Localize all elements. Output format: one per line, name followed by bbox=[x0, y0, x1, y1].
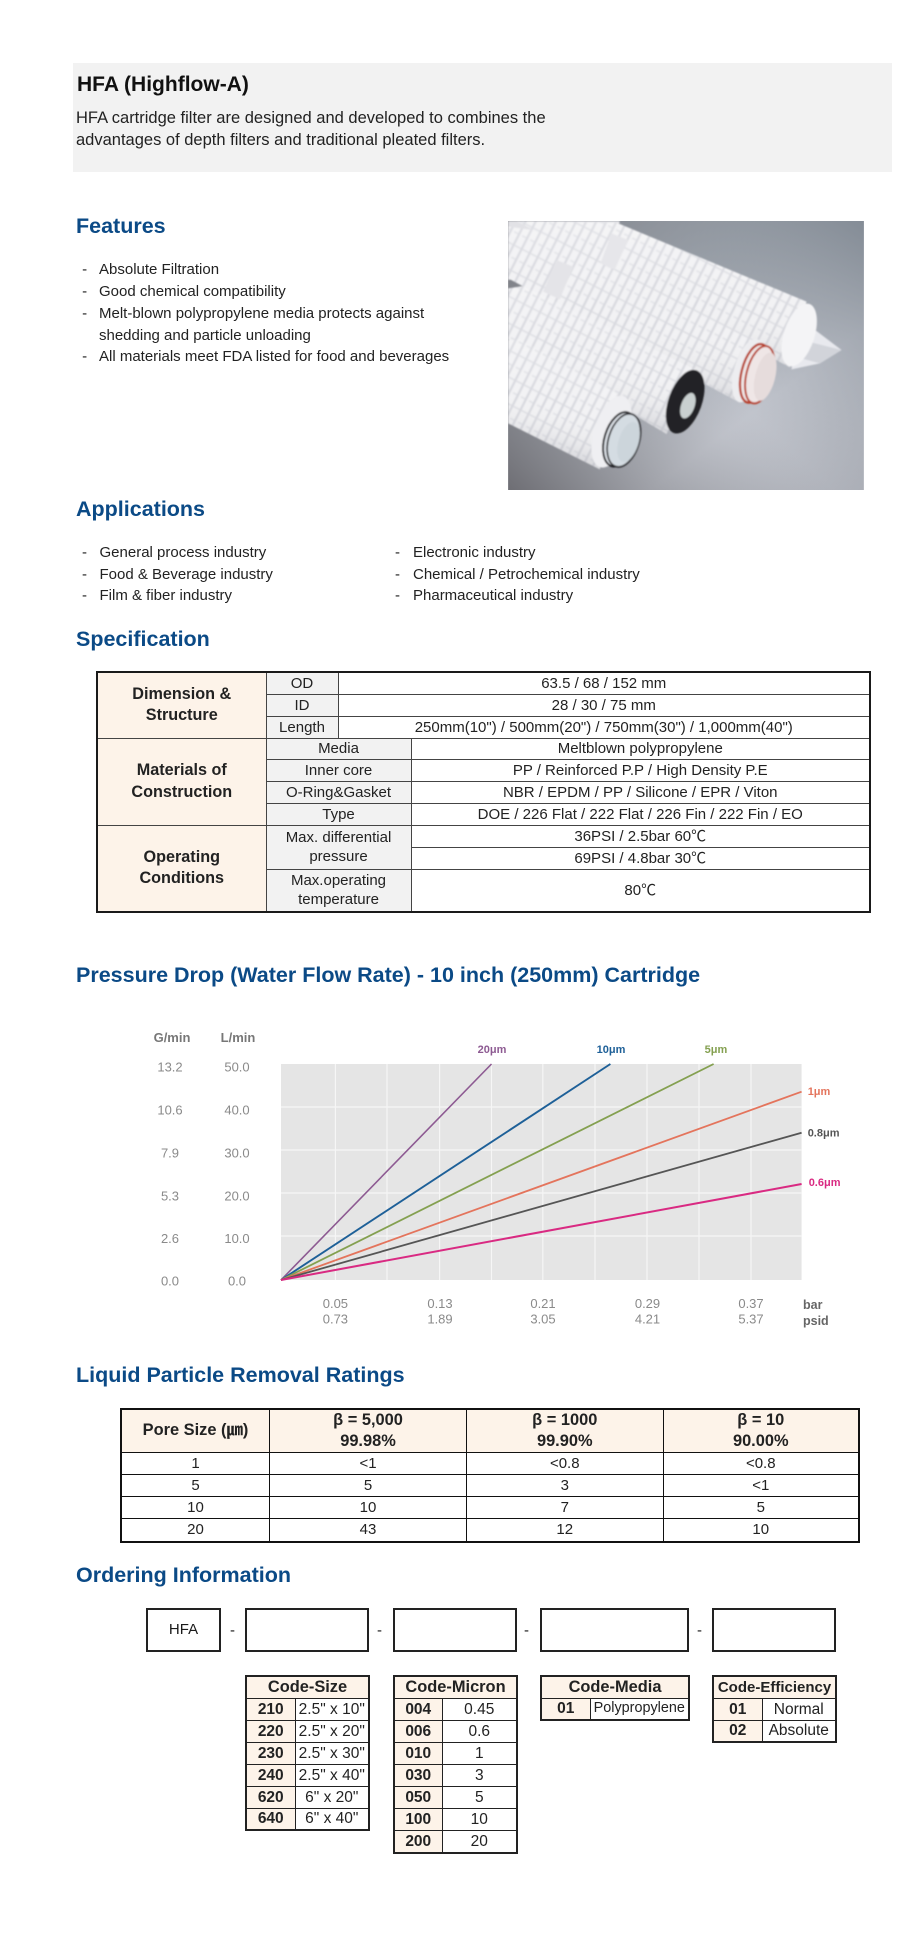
table: code size bbox=[245, 1675, 370, 1831]
specification table: 63.5 / 68 / 152 mm bbox=[541, 675, 666, 692]
table: code efficiency: Code-Efficiency bbox=[718, 1679, 831, 1696]
specification table: Inner core bbox=[305, 762, 372, 778]
table: code micron bbox=[393, 1675, 518, 1854]
table: code micron: 20 bbox=[471, 1833, 488, 1850]
table: code micron: 10 bbox=[471, 1810, 488, 1828]
table: code micron: 3 bbox=[475, 1766, 484, 1784]
applications list: - bbox=[395, 587, 400, 604]
separator: - bbox=[230, 1622, 235, 1639]
specification table: NBR / EPDM / PP / Silicone / EPR / Viton bbox=[503, 784, 778, 800]
ratings table: 5 bbox=[191, 1477, 200, 1494]
table: code size: 6" x 40" bbox=[305, 1810, 358, 1827]
x axis labels bbox=[323, 1296, 764, 1326]
applications list: Chemical / Petrochemical industry bbox=[413, 566, 640, 583]
applications list: - bbox=[395, 544, 400, 561]
specification table: PP / Reinforced P.P / High Density P.E bbox=[513, 762, 768, 778]
specification table: Conditions bbox=[139, 869, 224, 887]
series labels: 10μm bbox=[597, 1044, 626, 1056]
applications list: - bbox=[395, 566, 400, 583]
y axis labels: 0.0 bbox=[161, 1274, 179, 1288]
series labels: 1μm bbox=[808, 1086, 831, 1098]
separator: - bbox=[697, 1622, 702, 1639]
specification table: 36PSI / 2.5bar 60℃ bbox=[574, 828, 706, 844]
table: code micron: 010 bbox=[405, 1744, 431, 1762]
code box: HFA bbox=[146, 1608, 221, 1652]
line: 20um bbox=[281, 1064, 492, 1280]
x axis labels: 0.29 bbox=[635, 1296, 660, 1311]
cartridge 3 with black gasket bbox=[508, 286, 712, 439]
series labels: 5μm bbox=[705, 1044, 728, 1056]
applications list: General process industry bbox=[100, 544, 266, 561]
specification table: Materials of bbox=[137, 761, 227, 779]
ratings table: <1 bbox=[359, 1455, 377, 1472]
table: code micron: 030 bbox=[405, 1766, 431, 1784]
intro text: HFA cartridge filter are designed and developed to combines the bbox=[76, 109, 546, 127]
applications list: - bbox=[82, 587, 87, 604]
line: 10um bbox=[281, 1064, 610, 1280]
features list: - bbox=[82, 261, 87, 278]
series labels: 20μm bbox=[478, 1044, 507, 1056]
specification table: Construction bbox=[131, 782, 232, 800]
ratings table: 10 bbox=[360, 1499, 376, 1516]
x axis labels: 0.73 bbox=[323, 1312, 348, 1326]
table: code micron: 006 bbox=[405, 1722, 431, 1740]
table: code micron: 1 bbox=[475, 1744, 484, 1762]
ratings table: 43 bbox=[360, 1521, 376, 1538]
features list: Melt-blown polypropylene media protects against bbox=[99, 304, 424, 322]
x axis labels: 0.05 bbox=[323, 1296, 348, 1311]
table: code size: Code-Size bbox=[268, 1678, 347, 1696]
code box: efficiency bbox=[712, 1608, 836, 1652]
specification table: O-Ring&Gasket bbox=[286, 784, 391, 800]
x axis labels: 0.13 bbox=[427, 1296, 453, 1311]
features list: Good chemical compatibility bbox=[99, 282, 286, 300]
specification table bbox=[96, 671, 871, 913]
intro text: advantages of depth filters and traditional pleated filters. bbox=[76, 131, 485, 149]
applications list: - bbox=[82, 544, 87, 561]
heading: ordering information: Ordering Information bbox=[76, 1563, 291, 1587]
code box: media bbox=[540, 1608, 689, 1652]
specification table: Meltblown polypropylene bbox=[558, 740, 723, 757]
table: code media bbox=[540, 1675, 690, 1721]
ratings table: 5 bbox=[364, 1477, 372, 1494]
table: code efficiency bbox=[712, 1675, 837, 1743]
table: code size: 2.5" x 20" bbox=[299, 1722, 365, 1740]
ratings table: 10 bbox=[187, 1499, 204, 1516]
y axis labels: 10.6 bbox=[157, 1102, 183, 1118]
ratings table: 99.98% bbox=[340, 1432, 396, 1450]
specification table: ID bbox=[294, 696, 310, 714]
table: code efficiency: Absolute bbox=[769, 1722, 829, 1739]
cartridge 2 with red o-ring bbox=[508, 227, 781, 406]
table: code size: 230 bbox=[258, 1744, 284, 1762]
y axis labels: 2.6 bbox=[161, 1231, 179, 1246]
y axis labels: 20.0 bbox=[224, 1188, 250, 1204]
title: HFA (Highflow-A) bbox=[77, 73, 249, 96]
line: 5um bbox=[281, 1064, 714, 1280]
features list bbox=[82, 261, 449, 365]
ratings table: Pore Size (㎛) bbox=[143, 1421, 248, 1439]
specification table: Dimension & bbox=[132, 685, 231, 703]
applications list: - bbox=[82, 566, 87, 583]
table: code size: 210 bbox=[258, 1700, 284, 1718]
table: code size: 2.5" x 30" bbox=[299, 1744, 365, 1762]
table: code media: Polypropylene bbox=[594, 1700, 685, 1716]
ratings table: <1 bbox=[752, 1477, 769, 1494]
x axis units bbox=[803, 1298, 829, 1328]
code box: size bbox=[245, 1608, 369, 1652]
table: code micron: 200 bbox=[405, 1833, 431, 1850]
x axis units: psid bbox=[803, 1314, 829, 1328]
separator: - bbox=[377, 1622, 382, 1639]
intro text bbox=[76, 109, 546, 149]
specification table: temperature bbox=[298, 891, 379, 908]
heading: pressure drop: Pressure Drop (Water Flow Rate) - 10 inch (250mm) Cartridge bbox=[76, 963, 700, 987]
features list: - bbox=[82, 282, 87, 300]
x axis units: bar bbox=[803, 1298, 823, 1312]
ratings table: 1 bbox=[191, 1455, 200, 1472]
heading: features: Features bbox=[76, 214, 166, 238]
table: code size: 620 bbox=[258, 1788, 284, 1806]
series labels: 0.6μm bbox=[809, 1177, 841, 1189]
table: code efficiency: 01 bbox=[729, 1700, 746, 1718]
applications list: Pharmaceutical industry bbox=[413, 587, 573, 604]
features list: shedding and particle unloading bbox=[99, 326, 311, 344]
ratings table: 12 bbox=[556, 1521, 573, 1538]
specification table: 69PSI / 4.8bar 30℃ bbox=[574, 850, 706, 866]
specification table: Media bbox=[318, 740, 359, 757]
pressure drop line chart bbox=[154, 1030, 841, 1328]
y axis labels: 50.0 bbox=[224, 1060, 250, 1074]
x axis labels: 5.37 bbox=[738, 1312, 764, 1326]
y axis labels bbox=[154, 1030, 255, 1288]
specification table: 250mm(10") / 500mm(20") / 750mm(30") / 1,000mm(40") bbox=[415, 718, 793, 736]
ratings table: 7 bbox=[561, 1499, 569, 1516]
header panel bbox=[73, 63, 892, 172]
code box: HFA: HFA bbox=[169, 1621, 198, 1638]
ordering code row bbox=[146, 1608, 836, 1652]
table: code micron: 004 bbox=[405, 1700, 431, 1718]
cartridge 4 with black o-ring bbox=[508, 339, 646, 473]
ratings table: β = 10 bbox=[737, 1411, 784, 1429]
applications list: Electronic industry bbox=[413, 544, 536, 561]
specification table: 28 / 30 / 75 mm bbox=[552, 696, 656, 714]
heading: specification: Specification bbox=[76, 627, 210, 651]
ratings table bbox=[120, 1408, 860, 1542]
heading: applications: Applications bbox=[76, 497, 205, 521]
code box: micron bbox=[393, 1608, 517, 1652]
specification table: Max. differential bbox=[286, 829, 391, 846]
y axis labels: G/min bbox=[154, 1030, 190, 1045]
separator: - bbox=[524, 1622, 529, 1639]
ratings table: 3 bbox=[561, 1477, 569, 1494]
y axis labels: 13.2 bbox=[157, 1060, 183, 1074]
line: 0.6um bbox=[281, 1184, 802, 1280]
ratings table: 90.00% bbox=[733, 1432, 789, 1450]
ratings table: <0.8 bbox=[746, 1455, 776, 1472]
specification table: pressure bbox=[309, 848, 368, 865]
applications list bbox=[82, 544, 640, 604]
specification table: OD bbox=[291, 675, 313, 692]
cartridge fill behind upper left bbox=[508, 221, 620, 280]
ratings table: 20 bbox=[187, 1521, 204, 1538]
table: code size: 640 bbox=[258, 1810, 284, 1827]
x axis labels: 0.21 bbox=[530, 1296, 556, 1311]
specification table: Length bbox=[279, 718, 325, 736]
table: code micron: 0.6 bbox=[468, 1722, 490, 1740]
y axis labels: 10.0 bbox=[224, 1231, 250, 1246]
specification table: Type bbox=[322, 806, 355, 822]
table: code size: 6" x 20" bbox=[305, 1788, 358, 1806]
specification table: Max.operating bbox=[291, 872, 386, 889]
specification table: Operating bbox=[144, 848, 220, 866]
applications list: Food & Beverage industry bbox=[100, 566, 273, 583]
x axis labels: 4.21 bbox=[635, 1312, 660, 1326]
y axis labels: L/min bbox=[221, 1030, 255, 1045]
table: code micron: 0.45 bbox=[464, 1700, 494, 1718]
table: code media: Code-Media bbox=[569, 1678, 661, 1696]
ratings table: 10 bbox=[752, 1521, 769, 1538]
product photo: filter cartridges bbox=[508, 221, 864, 490]
features list: - bbox=[82, 348, 87, 365]
y axis labels: 30.0 bbox=[224, 1146, 250, 1160]
y axis labels: 0.0 bbox=[228, 1274, 246, 1288]
ratings table: β = 1000 bbox=[532, 1411, 597, 1429]
x axis labels: 1.89 bbox=[427, 1312, 453, 1326]
y axis labels: 40.0 bbox=[224, 1102, 250, 1118]
table: code micron: Code-Micron bbox=[405, 1678, 506, 1696]
table: code micron: 050 bbox=[405, 1788, 431, 1806]
features list: - bbox=[82, 304, 87, 322]
ratings table: β = 5,000 bbox=[333, 1411, 403, 1429]
ratings table: <0.8 bbox=[550, 1455, 580, 1472]
specification table: Structure bbox=[146, 706, 218, 724]
line: 1um bbox=[281, 1092, 802, 1280]
table: code size: 240 bbox=[258, 1766, 284, 1784]
y axis labels: 5.3 bbox=[161, 1188, 179, 1204]
table: code size: 2.5" x 10" bbox=[299, 1700, 365, 1718]
line: 0.8um bbox=[281, 1133, 802, 1280]
specification table: 80℃ bbox=[624, 882, 656, 899]
x axis labels: 0.37 bbox=[738, 1296, 764, 1311]
x axis labels: 3.05 bbox=[530, 1312, 556, 1326]
features list: Absolute Filtration bbox=[99, 261, 219, 278]
ratings table: 99.90% bbox=[537, 1432, 593, 1450]
features list: All materials meet FDA listed for food and beverages bbox=[99, 348, 449, 365]
cartridge 1 with cone bbox=[516, 221, 842, 371]
table: code size: 2.5" x 40" bbox=[299, 1766, 365, 1784]
heading: liquid particle removal ratings: Liquid Particle Removal Ratings bbox=[76, 1363, 405, 1387]
table: code efficiency: 02 bbox=[729, 1722, 746, 1739]
specification table: DOE / 226 Flat / 222 Flat / 226 Fin / 222 Fin / EO bbox=[478, 806, 803, 822]
table: code efficiency: Normal bbox=[774, 1700, 824, 1718]
series labels: 0.8μm bbox=[808, 1128, 840, 1140]
ratings table: 5 bbox=[757, 1499, 765, 1516]
table: code micron: 100 bbox=[405, 1810, 431, 1828]
y axis labels: 7.9 bbox=[161, 1146, 179, 1160]
applications list: Film & fiber industry bbox=[100, 587, 232, 604]
table: code micron: 5 bbox=[475, 1788, 484, 1806]
series labels bbox=[478, 1044, 841, 1189]
table: code media: 01 bbox=[557, 1700, 574, 1717]
table: code size: 220 bbox=[258, 1722, 284, 1740]
